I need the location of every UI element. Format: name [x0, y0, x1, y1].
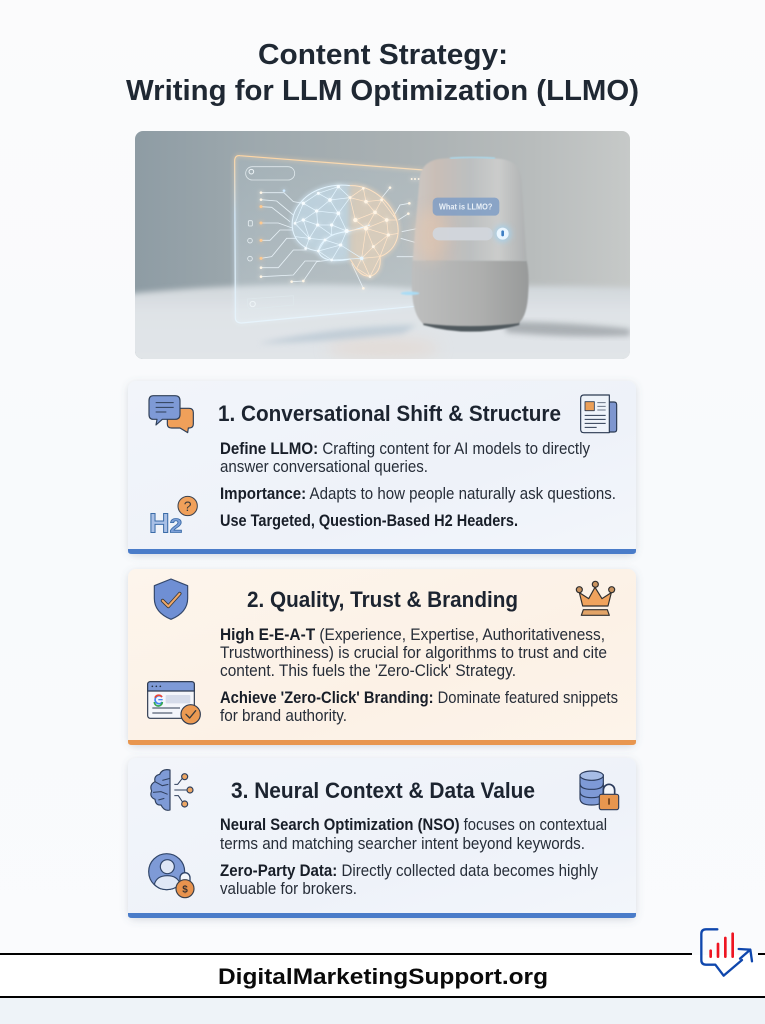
text: E-E-A-T: High E-E-A-T (Experience, Expertise, Authoritativeness,: [220, 626, 605, 644]
holographic panel: [235, 156, 427, 323]
title: Writing for LLM Optimization (LLMO): [126, 75, 639, 107]
smart speaker: [412, 157, 529, 332]
icon: newspaper: [581, 395, 617, 433]
text: zero-party data: Zero-Party Data: Directly collected data becomes highly: [220, 862, 599, 880]
icon: H2 question: 2: [170, 516, 182, 538]
text: zero-click branding: for brand authority.: [220, 707, 347, 725]
title: Content Strategy:: [258, 39, 508, 71]
text: define LLMO: Define LLMO: Crafting content for AI models to directly: [220, 440, 591, 458]
text: E-E-A-T: content. This fuels the 'Zero-Click' Strategy.: [220, 662, 516, 680]
text: zero-click branding: [220, 689, 618, 725]
icon: chat bubbles: [149, 396, 193, 433]
text: neural search optimization: [220, 816, 607, 853]
icon: neural brain: [151, 770, 193, 810]
heading 2: 2. Quality, Trust & Branding: [247, 587, 518, 612]
text: neural search optimization: terms and matching searcher intent beyond keywords.: [220, 835, 585, 853]
icon: user with money lock: $: [182, 884, 188, 895]
panel: 2. Quality, Trust & Branding: [128, 569, 636, 745]
icon: H2 question: ?: [184, 498, 192, 514]
title: [126, 39, 639, 107]
text: E-E-A-T: Trustworthiness) is crucial for algorithms to trust and cite: [220, 644, 607, 662]
text: H2 headers: Use Targeted, Question-Based H2 Headers.: [220, 512, 518, 530]
text: zero-click branding: Achieve 'Zero-Click' Branding: Dominate featured snippets: [220, 689, 618, 707]
heading 3: 3. Neural Context & Data Value: [231, 778, 535, 803]
icon: database lock: [580, 771, 619, 810]
text: define LLMO: answer conversational queries.: [220, 458, 428, 476]
text: neural search optimization: Neural Search Optimization (NSO) focuses on contextual: [220, 816, 607, 834]
panel: 3. Neural Context & Data Value: [128, 758, 636, 918]
footer website text: DigitalMarketingSupport.org: [218, 964, 548, 989]
icon: user with money lock: [149, 854, 194, 898]
panel: 1. Conversational Shift & Structure: [128, 381, 636, 554]
hero image: smart speaker and holographic brain: [135, 131, 630, 359]
text: define LLMO: [220, 440, 591, 476]
icon: browser search result: [148, 682, 200, 724]
icon: footer logo chart bubble: [701, 929, 752, 976]
icon: crown: [576, 581, 615, 615]
icon: H2 question: H: [149, 508, 170, 539]
text: zero-party data: valuable for brokers.: [220, 880, 357, 898]
heading 1: 1. Conversational Shift & Structure: [218, 401, 561, 426]
text: importance: Importance: Adapts to how people naturally ask questions.: [220, 485, 616, 503]
brain network: [292, 185, 398, 290]
text: zero-party data: [220, 862, 599, 898]
text: E-E-A-T: [220, 626, 607, 680]
icon: shield check: [154, 579, 188, 619]
icon: H2 question: [149, 496, 197, 539]
footer band: [0, 953, 765, 1024]
smart speaker: What is LLMO?: [439, 203, 492, 212]
